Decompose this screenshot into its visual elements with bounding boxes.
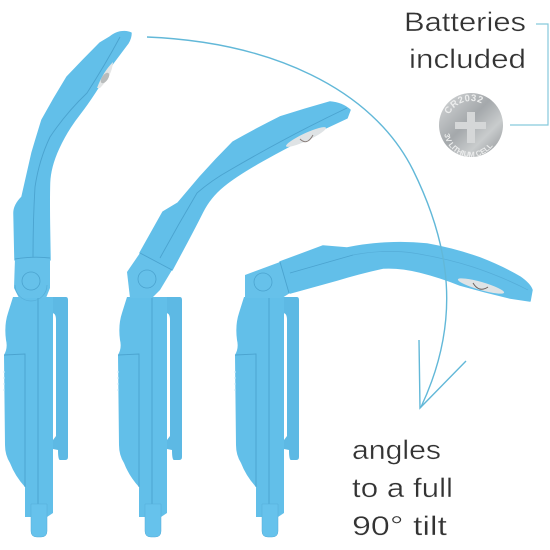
- lamp 1 pivot: [14, 257, 50, 298]
- lamp 3 clip: [281, 297, 299, 460]
- lamp 2 foot: [145, 504, 161, 537]
- lamp 1 body: [4, 297, 53, 517]
- caption: angles to a full 90° tilt: [352, 435, 453, 541]
- caption: angles to a full 90° tilt: angles: [352, 435, 441, 465]
- caption: angles to a full 90° tilt: to a full: [352, 473, 453, 503]
- icon: CR2032 coin battery: CR2032: [445, 94, 483, 114]
- lamp 2 clip: [164, 297, 182, 460]
- lamp 3 pivot: [245, 262, 290, 298]
- lamp 3 foot: [262, 504, 278, 537]
- lamp 3: full 90 degree tilt: [235, 243, 532, 537]
- lamp 1: upright: [4, 32, 131, 537]
- lamp 1 foot: [31, 504, 47, 537]
- heading: batteries included: Batteries: [404, 7, 526, 37]
- caption: angles to a full 90° tilt: 90° tilt: [352, 511, 448, 541]
- lamp 1 clip: [50, 297, 68, 460]
- lamp 2 pivot: [127, 253, 172, 298]
- bracket connector: [510, 24, 548, 125]
- lamp 3 arm: [280, 243, 532, 301]
- icon: CR2032 coin battery: 3V LITHIUM CELL: [444, 134, 493, 157]
- lamp 2 arm: [140, 102, 350, 270]
- icon: CR2032 coin battery: [439, 93, 503, 157]
- lamp 2 LED: [284, 124, 328, 150]
- lamp 1 LED: [97, 62, 113, 88]
- lamp 2: half tilt: [118, 102, 350, 537]
- heading: batteries included: included: [409, 44, 526, 74]
- lamp 3 body: [235, 297, 284, 517]
- arrow: tilt direction: [147, 37, 466, 408]
- lamp 1 arm: [14, 32, 131, 260]
- lamp 3 LED: [457, 276, 505, 296]
- heading: batteries included: [404, 7, 526, 74]
- lamp 2 body: [118, 297, 167, 517]
